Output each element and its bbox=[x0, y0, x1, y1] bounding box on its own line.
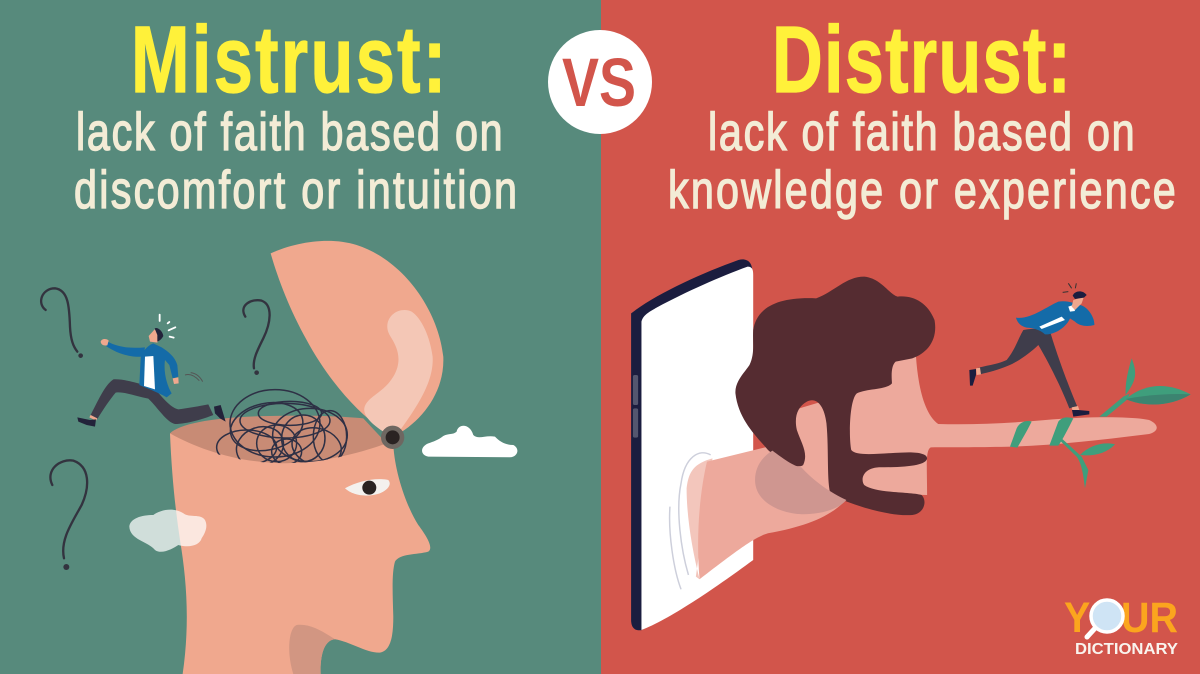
cheek shadow bbox=[755, 451, 846, 514]
man on nose bbox=[969, 283, 1094, 417]
head lower bbox=[170, 433, 430, 674]
illustration: phone and nose bbox=[631, 259, 1157, 630]
face and long nose bbox=[794, 357, 1157, 495]
eye bbox=[345, 479, 390, 496]
cloud right bbox=[422, 426, 517, 457]
badge: vs bbox=[548, 30, 652, 134]
badge: vs: VS bbox=[562, 44, 636, 121]
heading: mistrust: Mistrust: bbox=[131, 6, 446, 112]
man and vine on nose bbox=[969, 283, 1191, 488]
text: distrust definition: lack of faith based on bbox=[708, 103, 1135, 162]
hinge bbox=[381, 426, 404, 449]
heading: distrust: Distrust: bbox=[772, 6, 1071, 112]
neck shadow bbox=[289, 625, 335, 674]
logo magnifier bbox=[1087, 600, 1123, 637]
text: mistrust definition: lack of faith based on bbox=[76, 103, 503, 162]
skull highlight bbox=[364, 310, 433, 435]
text: mistrust definition: discomfort or intuition bbox=[74, 161, 517, 220]
illustration: open head bbox=[41, 241, 517, 674]
skull top bbox=[271, 241, 443, 437]
text: mistrust definition bbox=[74, 103, 517, 220]
motion lines bbox=[670, 453, 711, 589]
running man bbox=[77, 315, 226, 427]
head opening bbox=[170, 416, 387, 463]
panel: distrust background bbox=[601, 0, 1200, 674]
cloud left bbox=[129, 510, 206, 552]
scribble and running man on head bbox=[77, 315, 347, 473]
hair bbox=[735, 277, 935, 515]
phone bbox=[631, 259, 753, 630]
question marks bbox=[41, 288, 270, 558]
vine bbox=[1010, 358, 1191, 488]
hand wrist bbox=[687, 458, 712, 579]
panel: mistrust background bbox=[0, 0, 601, 674]
text: distrust definition: knowledge or experience bbox=[668, 161, 1176, 220]
logo: your dictionary: DICTIONARY bbox=[1075, 641, 1179, 658]
question dots bbox=[63, 353, 259, 570]
scribble brain bbox=[217, 390, 347, 473]
logo: your dictionary: YOUR bbox=[1064, 594, 1178, 642]
text: distrust definition bbox=[668, 103, 1176, 220]
